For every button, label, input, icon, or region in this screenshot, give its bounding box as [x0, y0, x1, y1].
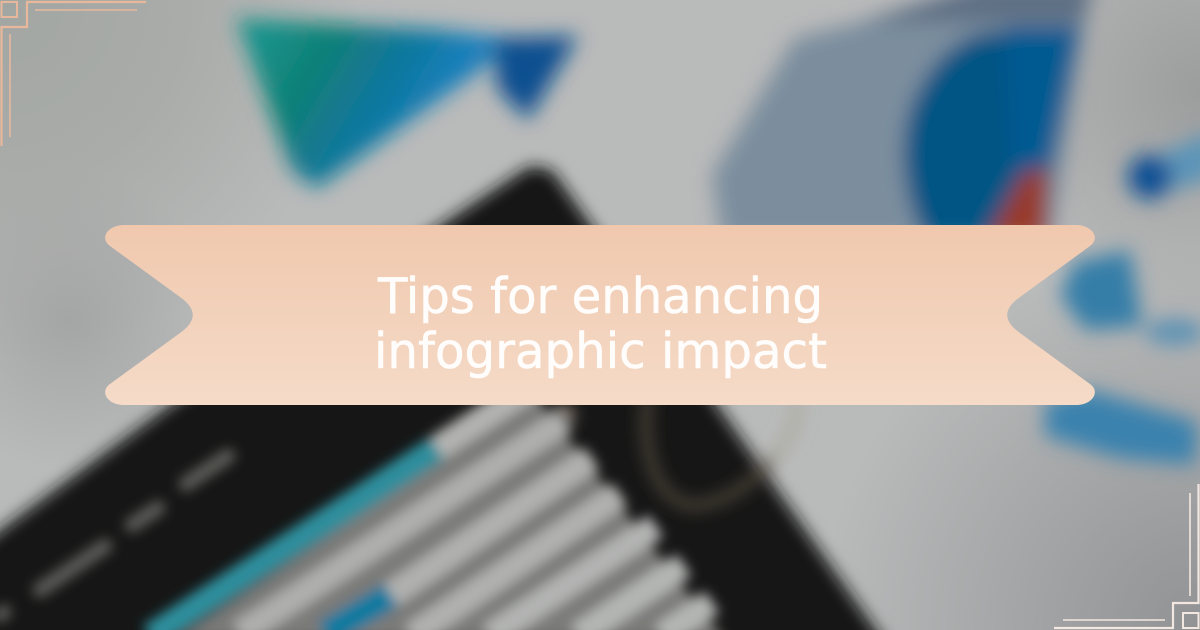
title: infographic impact	[374, 323, 827, 380]
corner ornament: bottom right	[1054, 484, 1198, 628]
corner ornament: top left	[2, 2, 146, 146]
title: Tips for enhancing	[377, 268, 823, 325]
dark notebook	[0, 166, 890, 630]
title ribbon	[105, 225, 1095, 405]
glasses arc	[556, 395, 796, 505]
teal and blue triangle chart	[236, 18, 578, 188]
blurred blue marks on the right	[1045, 130, 1200, 465]
blurred pie chart sheet	[712, 0, 1095, 240]
faint labels on the notebook	[0, 456, 228, 615]
striped bar chart	[150, 384, 725, 630]
title	[374, 268, 827, 380]
